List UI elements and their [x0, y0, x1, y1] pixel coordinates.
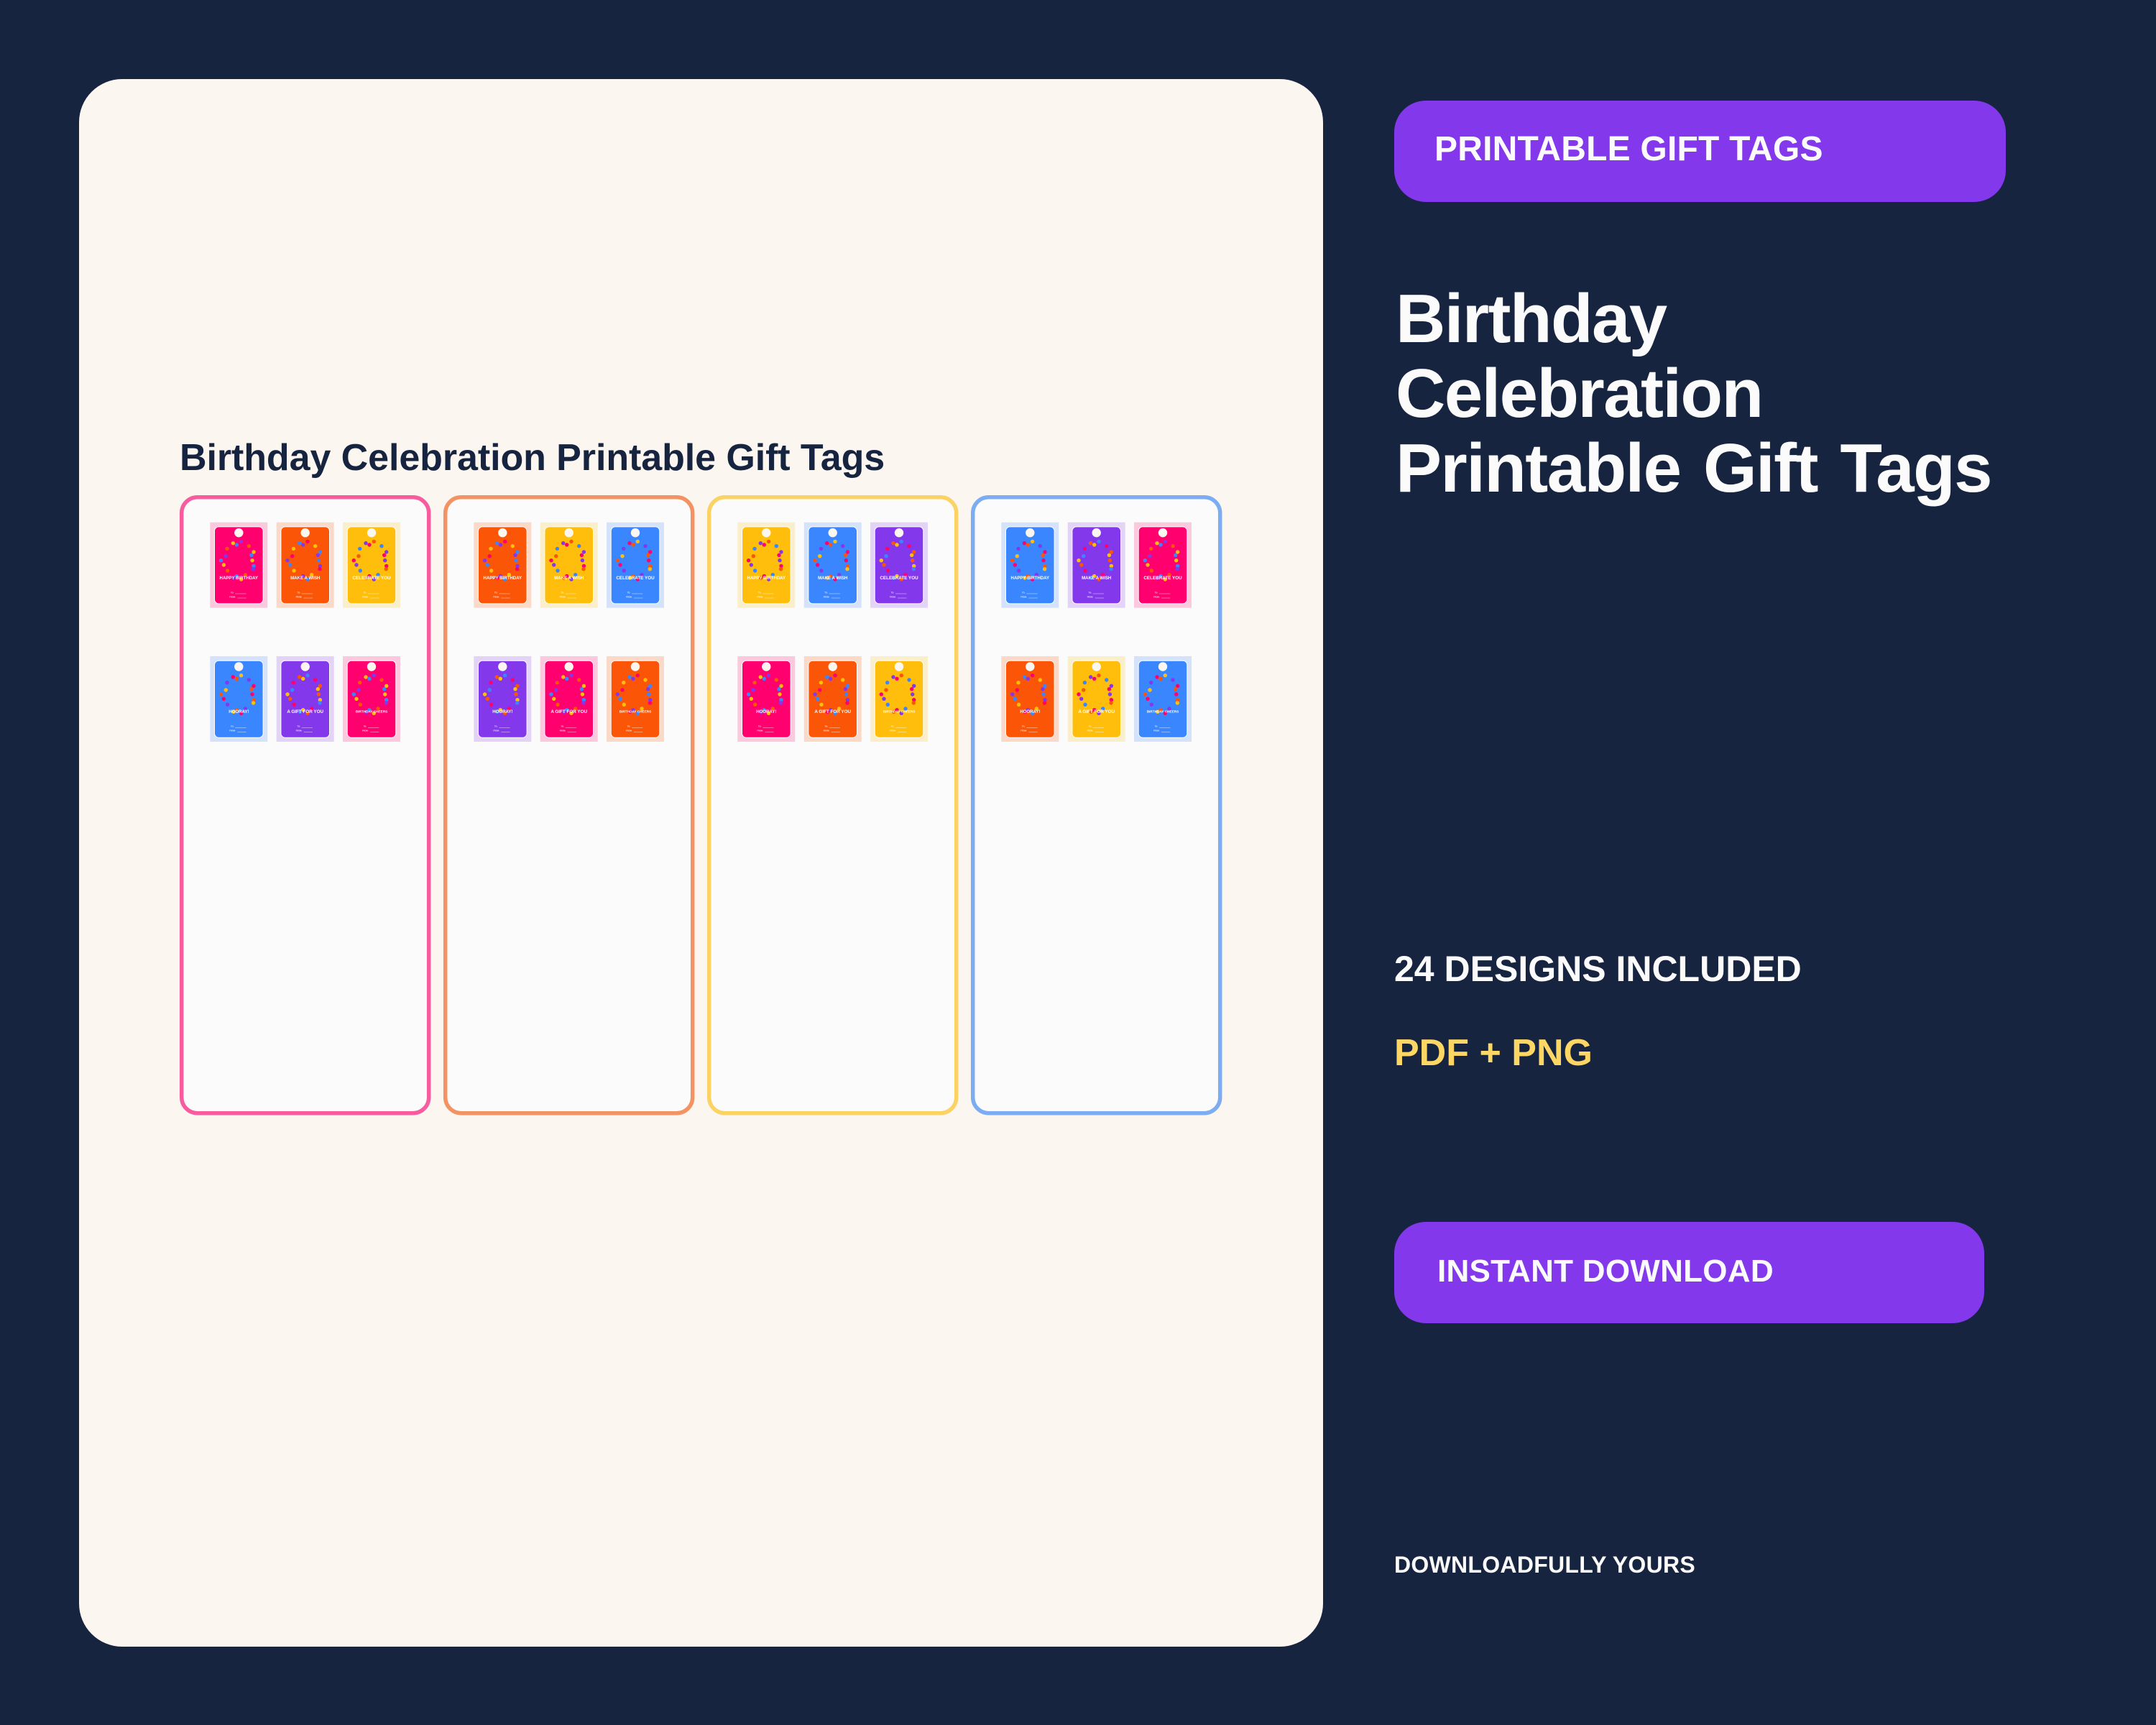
button: instant download — [1394, 1222, 1984, 1323]
tag: pink happy birthday: TO: — [231, 591, 234, 594]
tag: purple a gift for you: A GIFT FOR YOU — [287, 709, 324, 714]
tag: blue celebrate you: FROM: — [626, 595, 632, 598]
tag: yellow birthday cheers — [870, 656, 928, 742]
tag: blue hooray: HOORAY! — [229, 709, 249, 714]
tag: blue celebrate you: TO: — [627, 591, 630, 594]
tag: yellow a gift for you — [1068, 656, 1125, 742]
tag: pink hooray: TO: — [758, 725, 762, 728]
tag: orange birthday cheers: TO: — [627, 725, 630, 728]
tag: pink a gift for you: TO: — [561, 725, 564, 728]
tag: orange a gift for you: A GIFT FOR YOU — [814, 709, 852, 714]
column 1: pink sheet — [182, 497, 429, 1113]
tag: yellow a gift for you: FROM: — [1087, 730, 1093, 732]
tag: yellow happy birthday: FROM: — [757, 595, 763, 598]
tag: orange a gift for you — [804, 656, 862, 742]
tag: purple make a wish: FROM: — [1087, 595, 1093, 598]
tag: purple celebrate you: TO: — [891, 591, 894, 594]
tag: yellow birthday cheers: BIRTHDAY CHEERS — [883, 710, 915, 714]
main title: Birthday — [1396, 280, 1667, 357]
tag: purple hooray — [474, 656, 531, 742]
tag: purple hooray: FROM: — [493, 730, 499, 732]
tag: pink happy birthday: HAPPY BIRTHDAY — [220, 576, 258, 581]
tag: purple a gift for you: TO: — [297, 725, 300, 728]
tag: pink birthday cheers: BIRTHDAY CHEERS — [356, 710, 387, 714]
column 4: blue sheet — [973, 497, 1220, 1113]
tag: orange happy birthday: HAPPY BIRTHDAY — [484, 576, 522, 581]
tag: orange a gift for you: TO: — [824, 725, 828, 728]
tag: pink a gift for you: FROM: — [560, 730, 566, 732]
tag: blue make a wish — [804, 523, 862, 608]
tag: purple make a wish — [1068, 523, 1125, 608]
tag: blue birthday cheers — [1134, 656, 1192, 742]
tag: orange hooray: TO: — [1022, 725, 1026, 728]
tag: blue hooray: FROM: — [229, 730, 236, 732]
tag: blue make a wish: MAKE A WISH — [818, 576, 847, 581]
main title: Printable Gift Tags — [1396, 430, 1991, 507]
panel: product preview — [79, 79, 1323, 1647]
tag: pink birthday cheers: TO: — [364, 725, 367, 728]
tag: blue make a wish: TO: — [824, 591, 828, 594]
tag: pink birthday cheers: FROM: — [362, 730, 369, 732]
tag: purple a gift for you — [277, 656, 334, 742]
tag: orange a gift for you: FROM: — [824, 730, 829, 732]
badge: printable gift tags: PRINTABLE GIFT TAGS — [1434, 130, 1823, 168]
tag: pink a gift for you: A GIFT FOR YOU — [550, 709, 588, 714]
tag: yellow make a wish — [540, 523, 598, 608]
tag: pink celebrate you: CELEBRATE YOU — [1143, 576, 1182, 581]
tag: orange make a wish — [277, 523, 334, 608]
tag: yellow make a wish: MAKE A WISH — [554, 576, 584, 581]
tag: orange make a wish: TO: — [297, 591, 300, 594]
tag: blue celebrate you — [607, 523, 664, 608]
tag: yellow make a wish: TO: — [561, 591, 564, 594]
tag: yellow celebrate you: FROM: — [362, 595, 369, 598]
tag: pink celebrate you: FROM: — [1153, 595, 1160, 598]
tag: pink hooray: FROM: — [757, 730, 763, 732]
tag: yellow celebrate you: TO: — [364, 591, 367, 594]
tag: purple a gift for you: FROM: — [296, 730, 302, 732]
tag: purple hooray: TO: — [494, 725, 498, 728]
tag: orange happy birthday: TO: — [494, 591, 498, 594]
tag: orange birthday cheers — [607, 656, 664, 742]
tag: purple hooray: HOORAY! — [492, 709, 512, 714]
tag: yellow a gift for you: A GIFT FOR YOU — [1078, 709, 1115, 714]
tag: yellow happy birthday: HAPPY BIRTHDAY — [747, 576, 786, 581]
tag: pink a gift for you — [540, 656, 598, 742]
tag: blue birthday cheers: TO: — [1155, 725, 1158, 728]
tag: orange birthday cheers: BIRTHDAY CHEERS — [619, 710, 651, 714]
tag: yellow celebrate you: CELEBRATE YOU — [352, 576, 391, 581]
tag: orange make a wish: MAKE A WISH — [290, 576, 320, 581]
tag: purple make a wish: MAKE A WISH — [1082, 576, 1111, 581]
tag: blue make a wish: FROM: — [824, 595, 829, 598]
tag: yellow birthday cheers: FROM: — [890, 730, 896, 732]
tag: yellow happy birthday: TO: — [758, 591, 762, 594]
column 3: yellow sheet — [709, 497, 957, 1113]
tag: orange hooray: HOORAY! — [1020, 709, 1040, 714]
tag: blue hooray: TO: — [231, 725, 234, 728]
button: instant download: INSTANT DOWNLOAD — [1437, 1254, 1774, 1289]
tag: orange make a wish: FROM: — [296, 595, 302, 598]
tag: blue happy birthday: TO: — [1022, 591, 1026, 594]
brand footer: DOWNLOADFULLY YOURS — [1394, 1552, 1695, 1578]
tag: purple celebrate you — [870, 523, 928, 608]
tag: pink celebrate you — [1134, 523, 1192, 608]
tag: orange hooray: FROM: — [1021, 730, 1027, 732]
preview heading: Birthday Celebration Printable Gift Tags — [180, 437, 885, 479]
tag: blue hooray — [210, 656, 267, 742]
tag: purple celebrate you: FROM: — [890, 595, 896, 598]
tag: blue happy birthday: HAPPY BIRTHDAY — [1011, 576, 1049, 581]
tag: purple make a wish: TO: — [1088, 591, 1092, 594]
tag: yellow happy birthday — [737, 523, 795, 608]
main title: Celebration — [1396, 355, 1762, 432]
badge: printable gift tags — [1394, 101, 2006, 202]
tag: pink birthday cheers — [343, 656, 400, 742]
tag: purple celebrate you: CELEBRATE YOU — [880, 576, 918, 581]
tag: pink hooray: HOORAY! — [756, 709, 776, 714]
tag: blue birthday cheers: FROM: — [1153, 730, 1160, 732]
main title — [1396, 280, 1991, 507]
tag: yellow birthday cheers: TO: — [891, 725, 894, 728]
tag: blue celebrate you: CELEBRATE YOU — [616, 576, 655, 581]
tag: yellow make a wish: FROM: — [560, 595, 566, 598]
tag: orange hooray — [1001, 656, 1059, 742]
tag: pink happy birthday: FROM: — [229, 595, 236, 598]
column 2: orange sheet — [446, 497, 693, 1113]
tag: pink happy birthday — [210, 523, 267, 608]
tag: yellow celebrate you — [343, 523, 400, 608]
feature: file formats: PDF + PNG — [1394, 1032, 1593, 1074]
tag: pink celebrate you: TO: — [1155, 591, 1158, 594]
tag: yellow a gift for you: TO: — [1088, 725, 1092, 728]
tag: orange birthday cheers: FROM: — [626, 730, 632, 732]
tag: blue happy birthday: FROM: — [1021, 595, 1027, 598]
tag: blue birthday cheers: BIRTHDAY CHEERS — [1147, 710, 1179, 714]
tag: orange happy birthday: FROM: — [493, 595, 499, 598]
tag: blue happy birthday — [1001, 523, 1059, 608]
feature: designs included: 24 DESIGNS INCLUDED — [1394, 949, 1802, 989]
tag: pink hooray — [737, 656, 795, 742]
tag: orange happy birthday — [474, 523, 531, 608]
